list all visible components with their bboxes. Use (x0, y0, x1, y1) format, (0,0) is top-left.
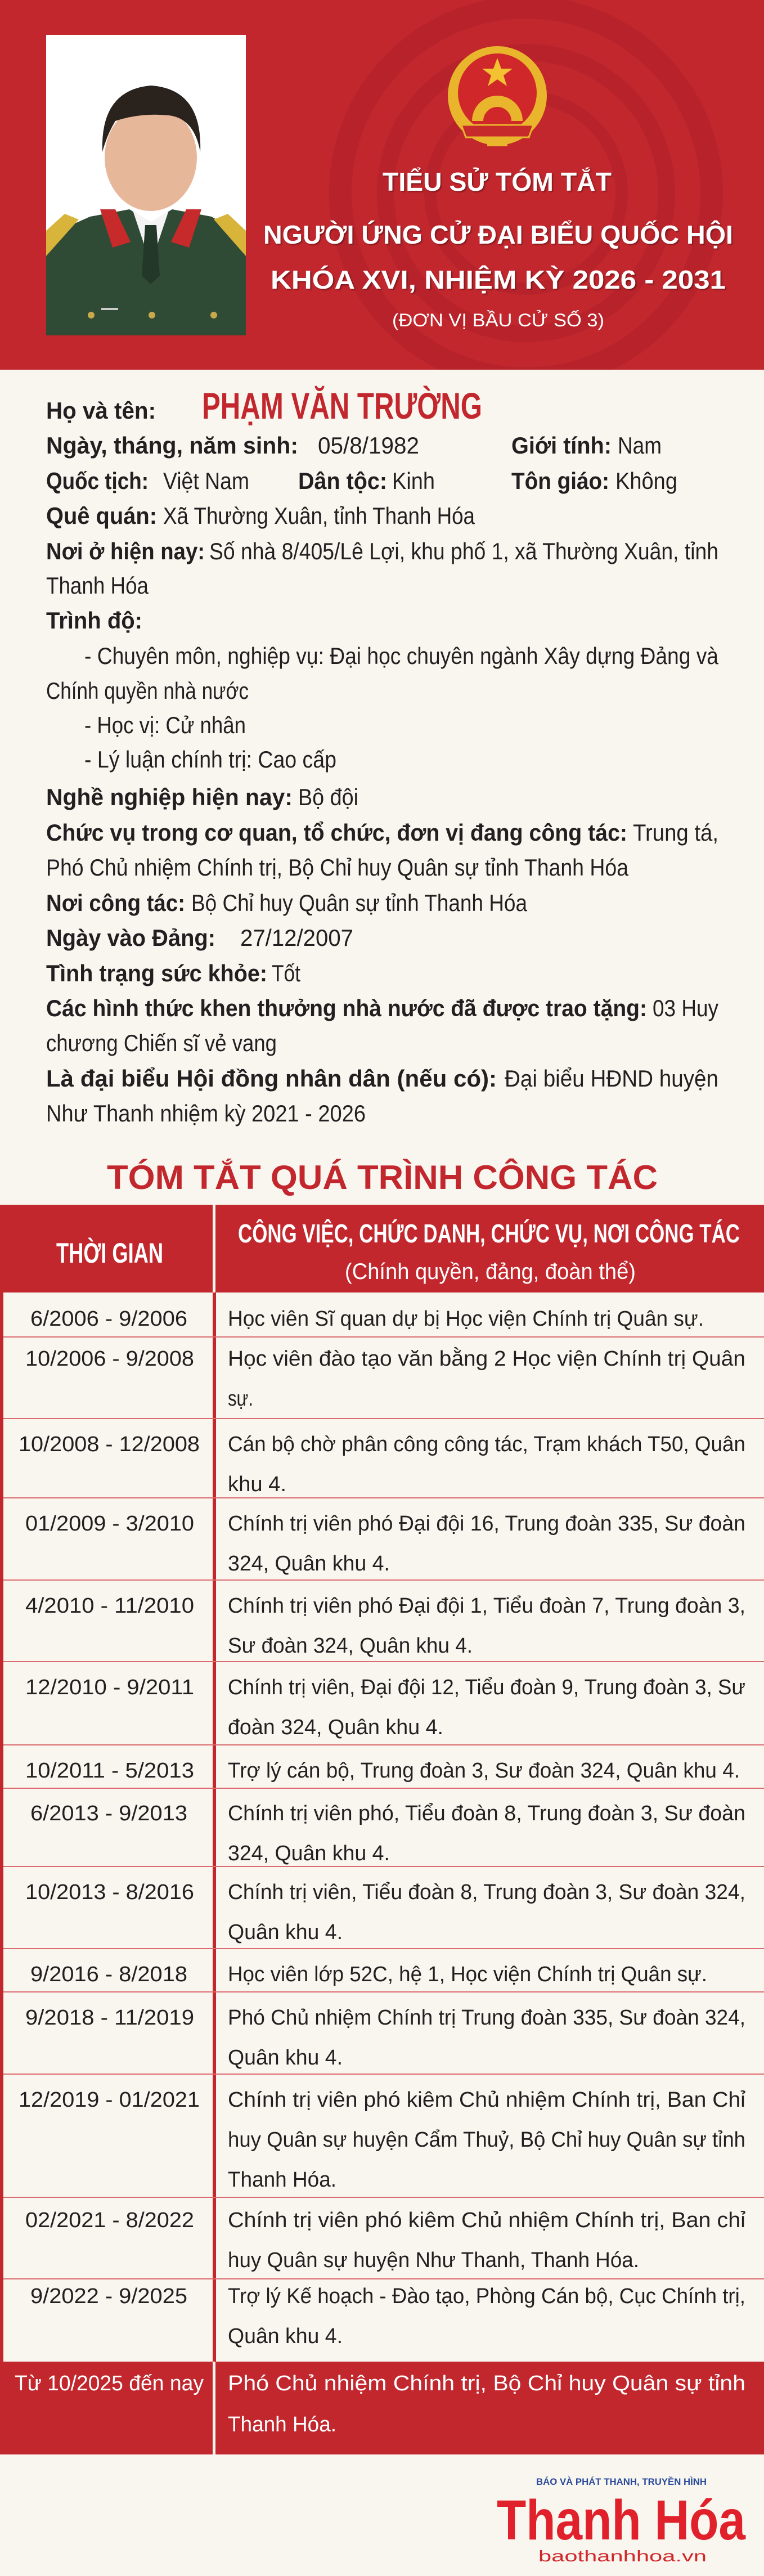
panel: personal info: Là đại biểu Hội đồng nhân dân (nếu có): (46, 1065, 497, 1092)
table rows text: Chính trị viên phó, Tiểu đoàn 8, Trung đoàn 3, Sư đoàn (228, 1802, 745, 1825)
table header: THỜI GIAN (56, 1237, 163, 1269)
name row (46, 385, 482, 427)
table rows text: 9/2016 - 8/2018 (30, 1963, 187, 1986)
panel: personal info: Tôn giáo: (511, 468, 609, 494)
table row: current position: Từ 10/2025 đến nay (15, 2372, 204, 2395)
table rows text: Học viên Sĩ quan dự bị Học viện Chính trị Quân sự. (228, 1307, 704, 1331)
panel: personal info: Đại biểu HĐND huyện (505, 1065, 718, 1092)
panel: personal info: 05/8/1982 (318, 432, 419, 459)
table rows text: Cán bộ chờ phân công công tác, Trạm khách T50, Quân (228, 1433, 745, 1456)
panel: personal info: Trung tá, (633, 819, 718, 846)
table rows text: 324, Quân khu 4. (228, 1552, 390, 1576)
panel: personal info: Các hình thức khen thưởng nhà nước đã được trao tặng: (46, 995, 647, 1021)
title (263, 167, 733, 294)
panel: personal info: Nghề nghiệp hiện nay: (46, 784, 293, 810)
panel: personal info: - Lý luận chính trị: Cao cấp (84, 746, 336, 773)
panel: personal info: 03 Huy (653, 995, 718, 1021)
table rows text: Chính trị viên phó Đại đội 16, Trung đoàn 335, Sư đoàn (228, 1512, 745, 1536)
panel: personal info: Chức vụ trong cơ quan, tổ chức, đơn vị đang công tác: (46, 819, 627, 846)
table rows text: Trợ lý Kế hoạch - Đào tạo, Phòng Cán bộ, Cục Chính trị, (228, 2285, 745, 2308)
table rows text: Sư đoàn 324, Quân khu 4. (228, 1634, 473, 1658)
subtitle: constituency: (ĐƠN VỊ BẦU CỬ SỐ 3) (392, 310, 604, 330)
panel: personal info: Ngày, tháng, năm sinh: (46, 432, 298, 459)
panel: personal info: Phó Chủ nhiệm Chính trị, Bộ Chỉ huy Quân sự tỉnh Thanh Hóa (46, 854, 629, 881)
table: work history (0, 1205, 764, 2454)
panel: personal info: Chính quyền nhà nước (46, 677, 249, 704)
table rows text: Thanh Hóa. (228, 2168, 336, 2192)
panel: personal info: Nơi công tác: (46, 890, 185, 916)
table rows text: Quân khu 4. (228, 2046, 343, 2070)
table rows text: khu 4. (228, 1473, 286, 1496)
table rows text: Chính trị viên phó kiêm Chủ nhiệm Chính trị, Ban Chỉ (228, 2088, 746, 2112)
table rows text: Trợ lý cán bộ, Trung đoàn 3, Sư đoàn 324, Quân khu 4. (228, 1759, 740, 1783)
table header (0, 1205, 764, 1293)
table rows text: 12/2019 - 01/2021 (19, 2088, 200, 2112)
panel: personal info: Quê quán: (46, 502, 157, 529)
table rows text: 324, Quân khu 4. (228, 1842, 390, 1865)
table rows text: 10/2006 - 9/2008 (25, 1347, 194, 1371)
table rows text: Chính trị viên, Đại đội 12, Tiểu đoàn 9, Trung đoàn 3, Sư (228, 1676, 745, 1699)
panel: personal info: Như Thanh nhiệm kỳ 2021 - 2026 (46, 1100, 366, 1127)
panel: personal info: Bộ Chỉ huy Quân sự tỉnh Thanh Hóa (191, 890, 528, 916)
icon: national emblem (448, 46, 547, 146)
panel: personal info: Quốc tịch: (46, 468, 149, 494)
panel: personal info: Tình trạng sức khỏe: (46, 960, 267, 986)
table rows text: 10/2008 - 12/2008 (19, 1433, 200, 1456)
name row: Họ và tên: (46, 397, 156, 424)
table rows text: 12/2010 - 9/2011 (25, 1676, 194, 1699)
table rows text: Chính trị viên phó kiêm Chủ nhiệm Chính trị, Ban chỉ (228, 2209, 746, 2232)
table rows text: huy Quân sự huyện Như Thanh, Thanh Hóa. (228, 2249, 639, 2272)
panel: personal info: Bộ đội (298, 784, 358, 810)
table rows text: 4/2010 - 11/2010 (25, 1594, 194, 1618)
panel: personal info: Kinh (392, 468, 435, 494)
table rows text: Chính trị viên, Tiểu đoàn 8, Trung đoàn 3, Sư đoàn 324, (228, 1881, 745, 1904)
logo: Thanh Hoa newspaper: baothanhhoa.vn (538, 2547, 707, 2565)
table row: current position: Phó Chủ nhiệm Chính trị, Bộ Chỉ huy Quân sự tỉnh (228, 2372, 745, 2395)
table rows text: đoàn 324, Quân khu 4. (228, 1716, 443, 1739)
table rows text: 9/2018 - 11/2019 (25, 2006, 194, 2030)
table row: current position (0, 2362, 764, 2454)
panel: personal info: Dân tộc: (298, 468, 387, 494)
header banner (0, 0, 764, 379)
panel: personal info: Trình độ: (46, 607, 142, 634)
table rows text: Chính trị viên phó Đại đội 1, Tiểu đoàn 7, Trung đoàn 3, (228, 1594, 745, 1618)
panel: personal info: Nam (618, 432, 662, 459)
panel: personal info: Việt Nam (163, 468, 249, 494)
panel: personal info: 27/12/2007 (240, 925, 353, 951)
panel: personal info: Xã Thường Xuân, tỉnh Thanh Hóa (163, 502, 475, 529)
table rows text: Phó Chủ nhiệm Chính trị Trung đoàn 335, Sư đoàn 324, (228, 2006, 745, 2030)
panel: personal info: Nơi ở hiện nay: (46, 538, 205, 564)
table rows text: huy Quân sự huyện Cẩm Thuỷ, Bộ Chỉ huy Quân sự tỉnh (228, 2128, 745, 2152)
heading: work history: TÓM TẮT QUÁ TRÌNH CÔNG TÁC (107, 1159, 658, 1196)
table body lines (0, 1293, 764, 2362)
panel: personal info: Thanh Hóa (46, 572, 149, 599)
name row: PHẠM VĂN TRƯỜNG (202, 385, 482, 427)
table rows text: 10/2013 - 8/2016 (25, 1881, 194, 1904)
panel: personal info: - Học vị: Cử nhân (84, 712, 246, 738)
panel: personal info: Ngày vào Đảng: (46, 925, 215, 951)
table rows text: 9/2022 - 9/2025 (30, 2285, 187, 2308)
title: KHÓA XVI, NHIỆM KỲ 2026 - 2031 (271, 265, 726, 294)
panel: personal info: Giới tính: (511, 432, 612, 459)
table rows text (19, 1307, 746, 2348)
panel: personal info: Không (615, 468, 677, 494)
panel: personal info: Tốt (272, 960, 300, 986)
title: NGƯỜI ỨNG CỬ ĐẠI BIỂU QUỐC HỘI (263, 220, 733, 249)
table rows text: sự. (228, 1387, 253, 1411)
table rows text: 01/2009 - 3/2010 (25, 1512, 194, 1536)
table rows text: 6/2006 - 9/2006 (30, 1307, 187, 1331)
table row: current position: Thanh Hóa. (228, 2413, 336, 2436)
photo: candidate portrait (46, 35, 246, 335)
table rows text: 10/2011 - 5/2013 (25, 1759, 194, 1783)
table rows text: 02/2021 - 8/2022 (25, 2209, 194, 2232)
panel: personal info (46, 385, 719, 1127)
table rows text: Học viên lớp 52C, hệ 1, Học viện Chính trị Quân sự. (228, 1963, 707, 1986)
table rows text: Quân khu 4. (228, 2324, 343, 2348)
table rows text: Học viên đào tạo văn bằng 2 Học viện Chính trị Quân (228, 1347, 745, 1371)
title: TIỂU SỬ TÓM TẮT (383, 167, 612, 196)
table rows text: Quân khu 4. (228, 1920, 343, 1944)
logo: Thanh Hoa newspaper (497, 2476, 746, 2565)
table rows text: 6/2013 - 9/2013 (30, 1802, 187, 1825)
panel: personal info: chương Chiến sĩ vẻ vang (46, 1030, 277, 1056)
logo: Thanh Hoa newspaper: BÁO VÀ PHÁT THANH, TRUYỀN HÌNH (536, 2476, 707, 2487)
table header: (Chính quyền, đảng, đoàn thể) (345, 1259, 636, 1284)
